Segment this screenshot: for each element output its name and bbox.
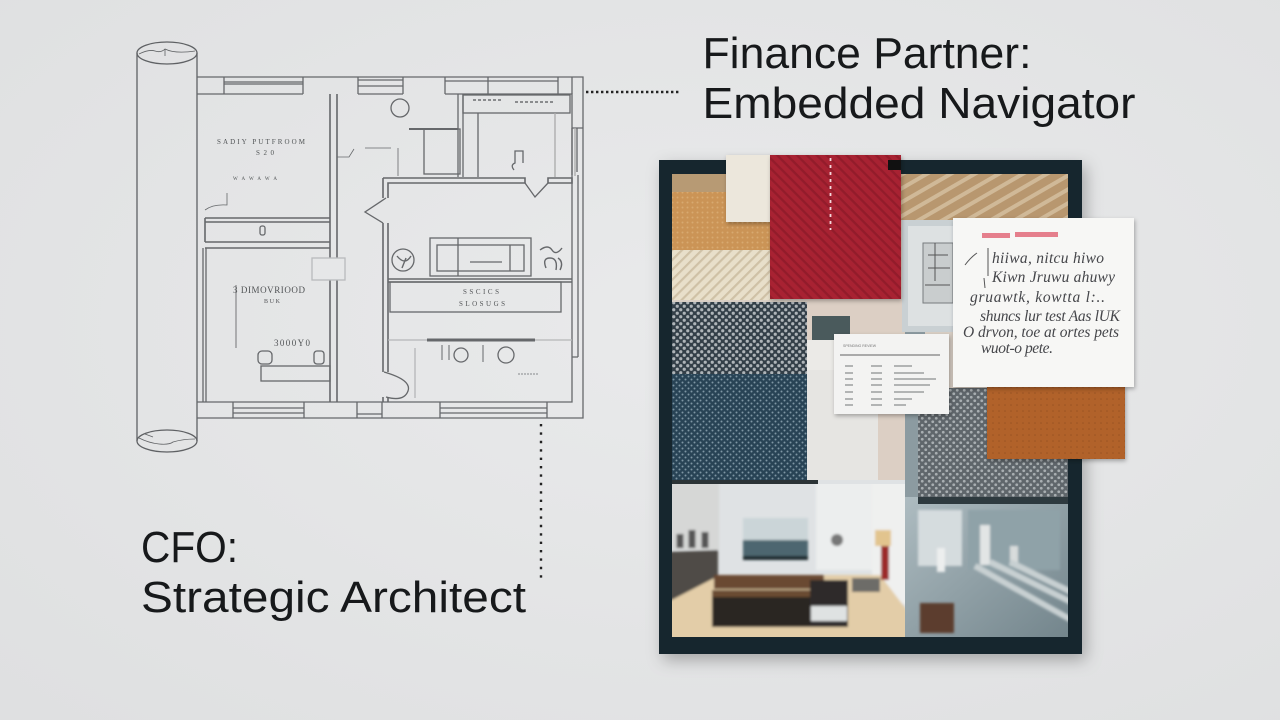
heading: Finance Partner: Finance Partner:	[702, 29, 1032, 78]
grey blue panel	[905, 330, 925, 500]
left rooms	[203, 94, 345, 402]
text on plan: SSCICS	[463, 288, 499, 296]
kitchen and bath	[337, 94, 575, 177]
text on plan: WAWAWA	[233, 177, 277, 182]
photo: bathroom	[905, 497, 1075, 637]
swatch: grey dots	[918, 388, 1068, 497]
connector: dotted line to Finance Partner heading	[586, 91, 680, 93]
swatch: cream diagonal	[672, 250, 772, 300]
moodboard panel	[659, 155, 1134, 654]
text on plan: S20	[256, 149, 274, 157]
floor plan	[197, 77, 583, 418]
icon: blueprint roll	[137, 42, 197, 452]
text on plan	[217, 138, 505, 348]
heading: CFO: Strategic Architect	[141, 573, 526, 622]
text on plan: SADIY PUTFROOM	[217, 138, 306, 146]
swatch: rust fabric	[987, 385, 1125, 459]
heading: CFO	[141, 523, 526, 622]
text on plan: BUK	[264, 299, 281, 305]
swatch: red fabric	[770, 155, 901, 299]
photo: living room	[672, 480, 905, 637]
note: handwritten: shuncs lur test Aas lUK	[980, 308, 1121, 325]
small floor plan picture	[902, 220, 955, 332]
swatch: blue dots	[672, 374, 807, 480]
note: handwritten: O drvon, toe at ortes pets	[963, 324, 1119, 341]
text on plan: SLOSUGS	[459, 300, 505, 308]
text on plan: 3000Y0	[274, 338, 310, 348]
swatch: navy dots	[672, 302, 807, 376]
swatch: orange weave	[672, 174, 772, 252]
living room	[365, 178, 572, 402]
note: handwritten: wuot-o pete.	[981, 340, 1053, 357]
note: handwritten: gruawtk, kowtta l:..	[970, 289, 1105, 306]
card: data table: SPENDING REVIEW	[843, 344, 877, 348]
swatch: white card	[726, 155, 772, 222]
text on plan: 3 DIMOVRIOOD	[233, 285, 306, 295]
heading: Finance Partner: Embedded Navigator	[702, 79, 1136, 128]
note: handwritten: hiiwa, nitcu hiwo	[992, 250, 1104, 267]
frame	[659, 160, 1082, 654]
board background	[672, 174, 1068, 637]
centre white shelving	[806, 300, 906, 482]
heading: Finance Partner	[702, 29, 1136, 128]
note: handwritten	[953, 218, 1134, 387]
swatch: wood diagonal	[900, 174, 1068, 220]
swatch: tan band	[672, 174, 728, 192]
card: data table	[834, 334, 949, 414]
connector: dotted line to CFO heading	[540, 424, 542, 582]
heading: CFO: CFO:	[141, 523, 238, 572]
outer walls	[197, 77, 583, 418]
note: handwritten: Kiwn Jruwu ahuwy	[991, 269, 1115, 286]
